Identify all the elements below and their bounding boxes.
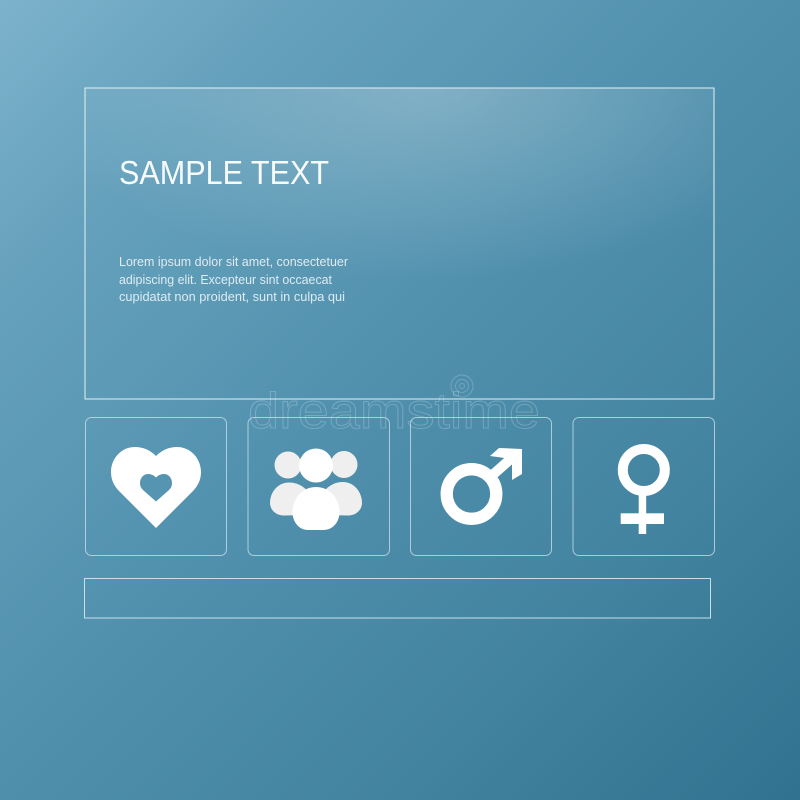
panel: heart card <box>86 418 226 556</box>
body text <box>119 255 348 304</box>
icon: group of people <box>270 448 362 530</box>
icon: male symbol <box>447 448 522 519</box>
body text: adipiscing elit. Excepteur sint occaecat <box>119 273 333 287</box>
body text: Lorem ipsum dolor sit amet, consectetuer <box>119 255 348 269</box>
panel: bottom bar <box>84 578 710 618</box>
icon: heart <box>111 447 201 528</box>
panel: male card <box>410 418 552 556</box>
icon: female symbol <box>621 449 665 534</box>
title: SAMPLE TEXT <box>119 155 329 192</box>
panel: main text panel <box>85 88 714 399</box>
body text: cupidatat non proident, sunt in culpa qui <box>119 290 345 304</box>
panel: female card <box>573 418 714 556</box>
watermark: dreamstime <box>248 383 540 439</box>
panel: group card <box>248 418 390 556</box>
